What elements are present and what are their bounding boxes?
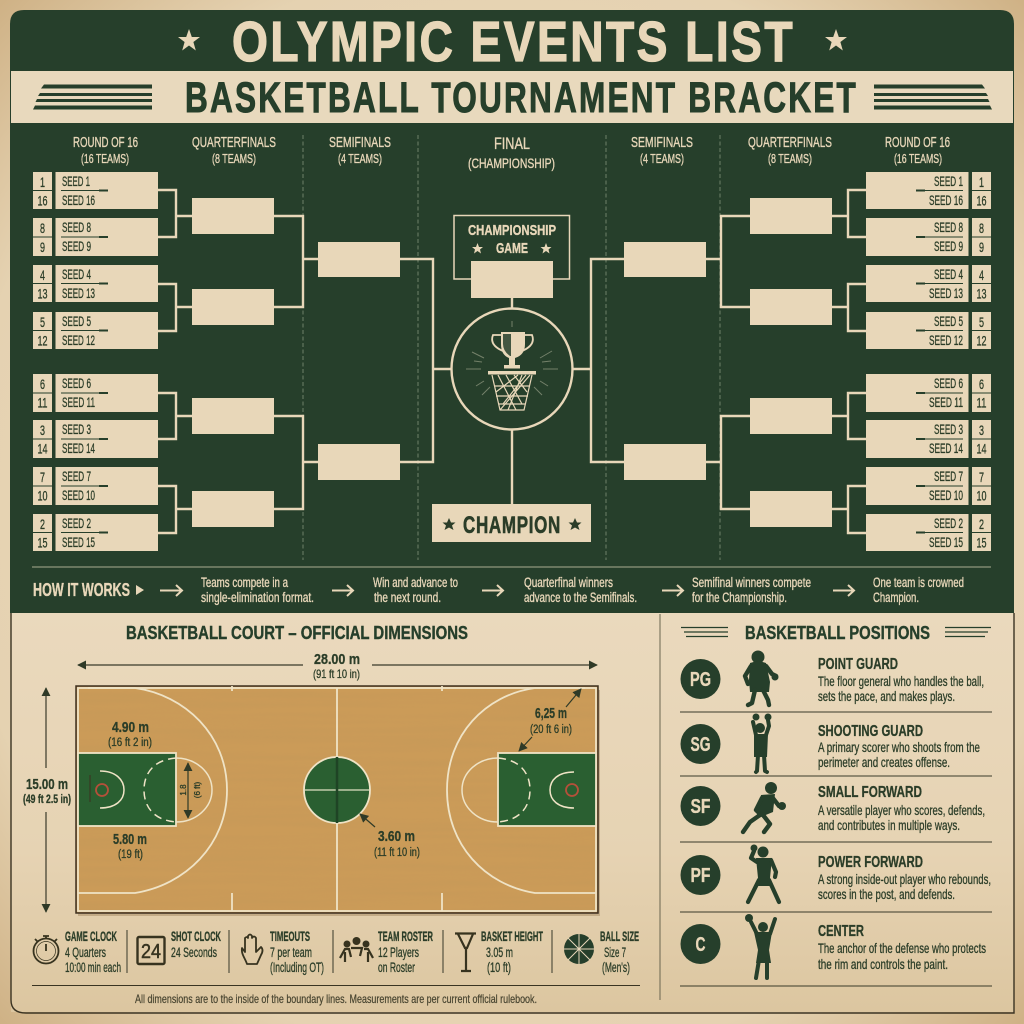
footnote: All dimensions are to the inside of the boundary lines. Measurements are per current official rulebook. [135,992,537,1006]
stat: shot clock: 24 Seconds [171,945,217,960]
column headings: ROUND OF 16 [73,134,138,151]
column headings: (16 TEAMS) [894,151,942,166]
position: small forward [680,782,985,833]
steps: Semifinal winners compete [692,575,811,590]
position: shooting guard: SG [690,734,710,756]
court width dimension [78,651,597,681]
basketball court [76,686,600,916]
seed labels right: 6 [979,376,984,392]
column headings: (8 TEAMS) [768,151,812,166]
seed labels left: SEED 11 [62,394,95,410]
steps: Quarterfinal winners [524,575,613,590]
court dimension notes: 3.60 m [378,828,415,845]
seed labels left: SEED 7 [62,468,91,484]
basket rim and net [488,371,536,410]
seed labels right: SEED 12 [929,332,963,348]
position: shooting guard: perimeter and creates offense. [818,754,950,770]
column headings: (CHAMPIONSHIP) [468,155,555,171]
position: small forward: and contributes in multiple ways. [818,817,960,833]
seed labels left: 2 [40,516,45,532]
position: center [680,914,986,978]
seed labels right: SEED 15 [929,534,963,550]
seed labels right: SEED 2 [934,515,963,531]
connectors [158,190,451,533]
stat: timeouts: TIMEOUTS [270,929,310,944]
seed labels left: 15 [38,534,48,550]
seed labels right: 13 [976,286,987,302]
seed labels left: 5 [40,314,45,330]
seed labels left [38,173,95,550]
championship game frame [454,216,570,298]
seed labels right: SEED 6 [934,375,963,391]
seed labels right: SEED 7 [934,468,963,484]
court dimension notes: 5.80 m [113,831,147,848]
seed labels right: SEED 4 [934,266,963,282]
court dimension notes: 1.8 [179,784,188,796]
seed labels right: SEED 3 [934,421,963,437]
seed labels right: 10 [976,488,987,504]
round divider lines [303,135,720,560]
seed labels left: 16 [38,192,48,208]
seed labels left: SEED 14 [62,440,95,456]
title: OLYMPIC EVENTS LIST [232,10,795,74]
stat: ball size: BALL SIZE [600,929,639,944]
court dimension notes: 4.90 m [112,719,149,736]
seed labels right: 15 [976,534,987,550]
steps: One team is crowned [873,575,964,590]
left key [78,753,212,826]
column headings: (16 TEAMS) [81,151,129,166]
seed labels right: SEED 16 [929,192,963,208]
court arrows [188,689,581,827]
star right [825,29,847,50]
steps: Teams compete in a [201,575,288,590]
seed labels right: SEED 1 [934,173,963,189]
seed labels right: 12 [976,332,987,348]
stat: team roster: TEAM ROSTER [378,929,433,944]
quarterfinal boxes [192,198,274,527]
position: power forward: POWER FORWARD [818,854,923,871]
title banner [178,10,847,74]
champion box [432,504,591,542]
quarterfinal boxes [750,198,832,527]
seed labels left: SEED 10 [62,487,95,503]
position: point guard: sets the pace, and makes plays. [818,688,955,704]
arrows [160,585,854,596]
seed boxes [866,172,991,551]
seed labels left: SEED 15 [62,534,95,550]
seed labels right: 3 [979,422,984,438]
court width dimension: 28.00 m [314,651,360,668]
column headings: (4 TEAMS) [338,151,382,166]
seed labels left: SEED 5 [62,313,91,329]
court dimension notes: (20 ft 6 in) [530,724,572,736]
positions heading: BASKETBALL POSITIONS [745,623,930,643]
champion box: CHAMPION [463,512,561,539]
championship game frame: CHAMPIONSHIP [468,222,556,239]
seed labels left: SEED 9 [62,238,91,254]
stat: basket height [455,929,543,975]
court height dimension: (49 ft 2.5 in) [23,794,71,806]
court dimension notes: 6,25 m [535,705,567,722]
position: center: CENTER [818,923,864,940]
seed labels right: SEED 14 [929,440,963,456]
seed labels right: SEED 9 [934,238,963,254]
seed labels right: 1 [979,174,984,190]
column headings: (8 TEAMS) [212,151,256,166]
seed labels left: 9 [40,239,45,255]
position: power forward [680,844,991,902]
stat: team roster: on Roster [378,960,415,975]
seed labels left: 14 [38,440,48,456]
panel: bracket green background [10,10,1014,613]
stat: ball size: (Men's) [602,960,630,975]
stat: game clock: 10:00 min each [65,960,121,975]
seed labels left: 8 [40,220,45,236]
seed labels left: SEED 8 [62,219,91,235]
star left [178,29,200,50]
column headings [73,134,950,171]
stat: shot clock: 24 [141,941,161,963]
position: point guard: PG [690,669,711,691]
column headings: (4 TEAMS) [640,151,684,166]
seed labels left: 3 [40,422,45,438]
stat: game clock: GAME CLOCK [65,929,117,944]
court lines [78,686,596,911]
stat: basket height: (10 ft) [487,960,511,975]
stat: basket height: BASKET HEIGHT [481,929,543,944]
stat: basket height: 3.05 m [486,945,513,960]
seed labels left: SEED 4 [62,266,91,282]
position: center: the rim and controls the paint. [818,956,948,972]
court dimension notes: (6 ft) [193,781,202,798]
column headings: QUARTERFINALS [748,134,832,151]
connectors [573,190,866,533]
court dimension notes: (16 ft 2 in) [108,737,152,749]
panel: lower section [11,613,1014,1012]
steps: advance to the Semifinals. [524,590,637,605]
seed labels left: 6 [40,376,45,392]
seed labels right: SEED 13 [929,285,963,301]
position: shooting guard [680,714,980,772]
seed labels left: 1 [40,174,45,190]
stat: team roster [340,929,433,975]
stat: ball size [564,929,639,975]
column headings: SEMIFINALS [329,134,391,151]
steps: single-elimination format. [201,590,314,605]
seed labels right: 5 [979,314,984,330]
stat: game clock [34,929,121,975]
seed labels left: 13 [38,286,48,302]
position: power forward: PF [690,865,710,887]
seed labels right [929,173,987,550]
how it works strip [32,567,991,605]
stat: timeouts: 7 per team [270,945,312,960]
court width dimension: (91 ft 10 in) [313,667,360,681]
seed labels left: SEED 12 [62,332,95,348]
seed labels right: SEED 8 [934,219,963,235]
seed labels right: SEED 5 [934,313,963,329]
stat: ball size: Size 7 [604,945,626,960]
court height dimension: 15.00 m [26,776,68,793]
court dimension notes: (19 ft) [118,849,143,861]
panel: basketball positions [680,623,992,986]
seed labels right: 9 [979,239,984,255]
how it works strip: HOW IT WORKS [33,580,130,600]
seed labels left: 12 [38,332,48,348]
stat: shot clock: SHOT CLOCK [171,929,221,944]
court height dimension [23,688,71,912]
stat: shot clock [138,929,221,964]
position: center: C [696,934,706,956]
seed labels left: SEED 16 [62,192,95,208]
position: point guard [680,650,984,705]
seed labels left: SEED 1 [62,173,90,189]
subtitle band [11,71,1013,123]
stat: timeouts: (Including OT) [270,960,324,975]
seed labels left: 11 [38,394,48,410]
trophy cup [492,332,533,368]
position: shooting guard: SHOOTING GUARD [818,723,923,740]
position: small forward: SMALL FORWARD [818,784,922,801]
left stripes [33,84,152,110]
seed labels right: 8 [979,220,984,236]
seed labels right: 16 [976,192,987,208]
steps: the next round. [374,590,441,605]
seed labels right: 2 [979,516,984,532]
column headings: SEMIFINALS [631,134,693,151]
seed dividers and arrows [916,190,991,532]
semifinal boxes [624,242,706,480]
seed labels left: SEED 6 [62,375,91,391]
stat: game clock: 4 Quarters [65,945,106,960]
bracket: left side boxes and connectors [33,172,451,551]
seed dividers and arrows [33,190,108,532]
stats row [34,929,639,975]
seed labels right: SEED 11 [929,394,963,410]
right stripes [874,84,992,110]
championship game frame: GAME [496,240,528,257]
center circle [304,757,370,823]
bracket: right side boxes and connectors [573,172,991,551]
seed labels left: 10 [38,488,48,504]
column headings: FINAL [494,134,530,153]
stat: timeouts [242,929,324,975]
semifinal boxes [318,242,400,480]
seed labels left: SEED 2 [62,515,91,531]
column headings: ROUND OF 16 [885,134,950,151]
seed boxes [33,172,158,551]
trophy and hoop emblem [452,298,572,504]
seed labels right: SEED 10 [929,487,963,503]
seed labels left: SEED 3 [62,421,91,437]
rays [466,321,558,395]
position: small forward: SF [690,796,710,818]
seed labels left: 7 [40,469,45,485]
stat: team roster: 12 Players [378,945,419,960]
steps: Win and advance to [373,575,458,590]
seed labels right: 14 [976,440,987,456]
position: power forward: scores in the post, and defends. [818,886,955,902]
steps: for the Championship. [692,590,787,605]
column headings: QUARTERFINALS [192,134,276,151]
seed labels left: 4 [40,267,45,283]
seed labels right: 11 [976,394,987,410]
seed labels right: 7 [979,469,984,485]
court heading: BASKETBALL COURT – OFFICIAL DIMENSIONS [126,623,468,643]
court dimension notes: (11 ft 10 in) [374,847,420,859]
steps [201,575,964,605]
seed labels left: SEED 13 [62,285,95,301]
court dimension notes [108,705,572,861]
seed labels right: 4 [979,267,984,283]
right key [462,753,596,826]
steps: Champion. [873,590,919,605]
position: point guard: POINT GUARD [818,656,898,673]
